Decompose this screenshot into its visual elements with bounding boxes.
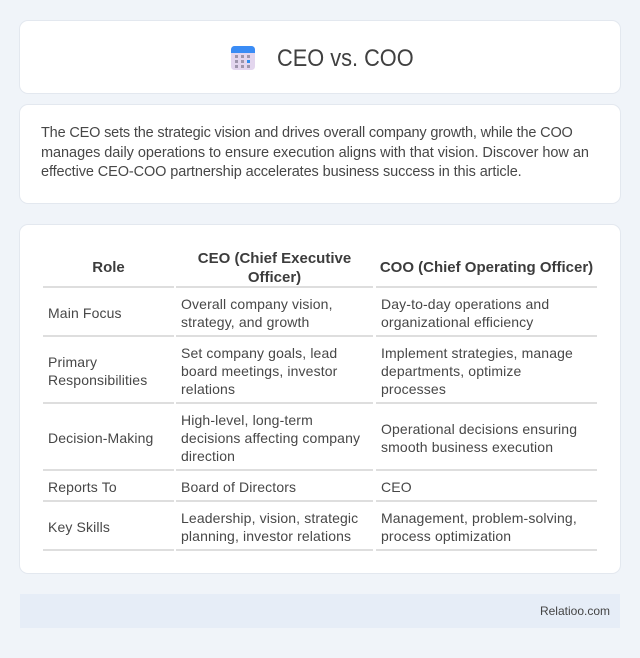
row: Decision-Making: smooth business execution xyxy=(381,439,553,455)
row: Main Focus xyxy=(48,296,549,330)
row: Primary Responsibilities: processes xyxy=(381,381,446,397)
row: Main Focus: strategy, and growth xyxy=(181,314,309,330)
panel: introduction xyxy=(20,105,620,203)
row: Key Skills xyxy=(48,510,577,544)
intro text: effective CEO-COO partnership accelerates business success in this article. xyxy=(41,164,522,180)
row: Decision-Making xyxy=(48,412,577,464)
row: Primary Responsibilities: Primary xyxy=(48,354,97,370)
row: Primary Responsibilities xyxy=(48,345,573,397)
row: Decision-Making: High-level, long-term xyxy=(181,412,313,428)
row: Primary Responsibilities: departments, optimize xyxy=(381,363,521,379)
row: Primary Responsibilities: Implement strategies, manage xyxy=(381,345,573,361)
row: Primary Responsibilities: board meetings, investor xyxy=(181,363,337,379)
row: Key Skills: Management, problem-solving, xyxy=(381,510,577,526)
row: Primary Responsibilities: Set company goals, lead xyxy=(181,345,337,361)
row: Key Skills: process optimization xyxy=(381,528,511,544)
icon: calendar xyxy=(231,46,255,70)
row: Key Skills: Key Skills xyxy=(48,519,110,535)
header: CEO: CEO (Chief Executive xyxy=(198,250,351,267)
row: Reports To xyxy=(48,479,412,495)
footer credit: Relatioo.com xyxy=(540,604,610,618)
row: Reports To: CEO xyxy=(381,479,412,495)
row: Main Focus: Overall company vision, xyxy=(181,296,333,312)
row: Reports To: Reports To xyxy=(48,479,117,495)
row: Primary Responsibilities: relations xyxy=(181,381,235,397)
panel: comparison table xyxy=(20,225,620,573)
row: Main Focus: Main Focus xyxy=(48,305,122,321)
header: COO: COO (Chief Operating Officer) xyxy=(380,259,593,276)
row: Reports To: Board of Directors xyxy=(181,479,296,495)
row: Decision-Making: Operational decisions ensuring xyxy=(381,421,577,437)
header: Role: Role xyxy=(92,259,125,276)
intro text: manages daily operations to ensure execution aligns with that vision. Discover how an xyxy=(41,144,589,160)
row: Main Focus: Day-to-day operations and xyxy=(381,296,549,312)
intro text: The CEO sets the strategic vision and drives overall company growth, while the COO xyxy=(41,125,573,141)
row: Decision-Making: decisions affecting company xyxy=(181,430,360,446)
row: Main Focus: organizational efficiency xyxy=(381,314,533,330)
header: CEO xyxy=(198,250,351,286)
panel: title card xyxy=(20,21,620,93)
row: Decision-Making: Decision-Making xyxy=(48,430,153,446)
table header xyxy=(92,250,593,286)
row: Key Skills: planning, investor relations xyxy=(181,528,351,544)
row: Primary Responsibilities: Responsibilities xyxy=(48,372,147,388)
intro text xyxy=(41,125,589,180)
title: CEO vs. COO xyxy=(277,45,414,72)
footer bar xyxy=(20,594,620,628)
header: CEO: Officer) xyxy=(248,269,301,286)
row: Key Skills: Leadership, vision, strategic xyxy=(181,510,358,526)
row: Decision-Making: direction xyxy=(181,448,235,464)
